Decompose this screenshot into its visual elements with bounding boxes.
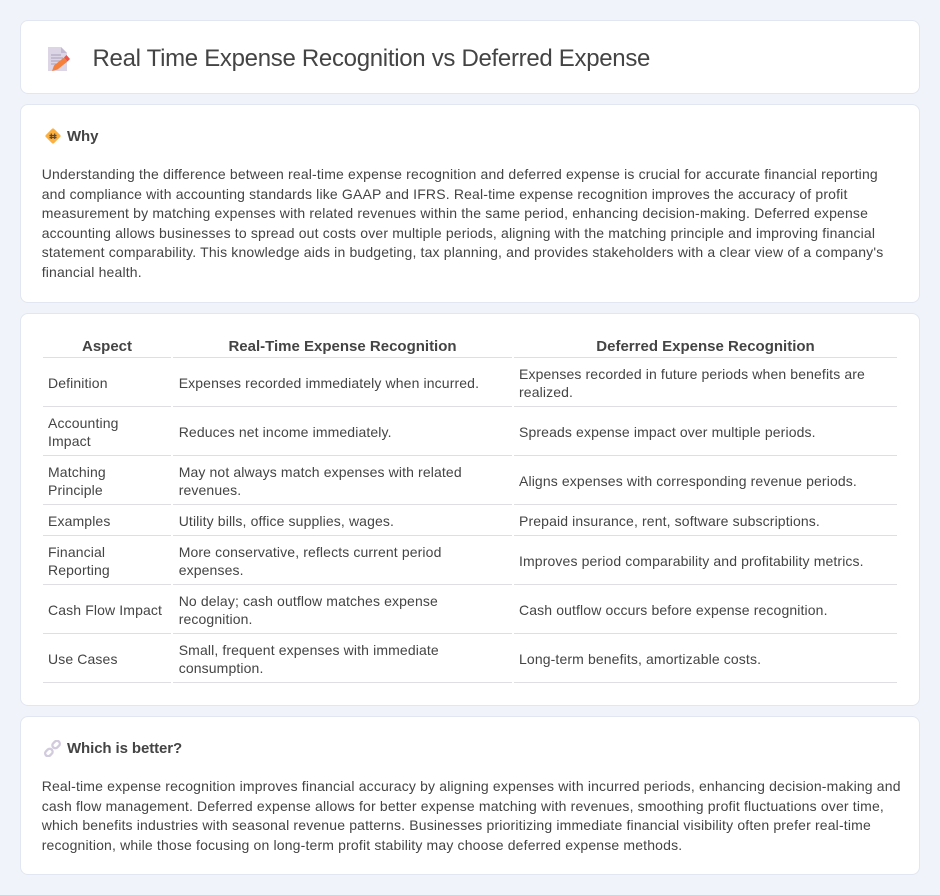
row: examples: Utility bills, office supplies, wages. [179,513,394,529]
table header row: Deferred Expense Recognition [596,338,815,355]
row: matching principle: Principle [48,482,103,498]
panel: why [20,104,920,303]
panel: header [20,20,920,94]
row: accounting impact: Reduces net income immediately. [179,424,392,440]
text block: why: financial health. [42,264,142,280]
row: cash flow impact [48,593,828,627]
text block: why: Understanding the difference between real-time expense recognition and deferred expense is crucial for accurate financial reporting [42,166,878,182]
table header row: Real-Time Expense Recognition [228,338,457,355]
row: matching principle: May not always match expenses with related [179,464,462,480]
text block: why [42,166,883,280]
row: financial reporting: More conservative, reflects current period [179,544,442,560]
row: matching principle: Aligns expenses with corresponding revenue periods. [519,473,857,489]
row: examples: Examples [48,513,110,529]
text block: why: measurement by matching expenses with related revenues within the same period, enhancing decision-making. Deferred expense [42,205,868,221]
row: definition [48,366,865,400]
row: cash flow impact: Cash Flow Impact [48,602,162,618]
row: matching principle: revenues. [179,482,241,498]
table header row [82,338,815,355]
heading: why: Why [67,128,98,145]
row: financial reporting: Improves period comparability and profitability metrics. [519,553,864,569]
row: definition: Definition [48,375,108,391]
text block: why: accounting allows businesses to spread out costs over multiple periods, aligning with the matching principle and improving financial [42,225,875,241]
row: accounting impact [48,415,816,449]
row: financial reporting: expenses. [179,562,244,578]
row: accounting impact: Impact [48,433,91,449]
row: matching principle [48,464,857,498]
row: cash flow impact: Cash outflow occurs before expense recognition. [519,602,828,618]
text block: which is better: which benefits industries with seasonal revenue patterns. Businesses prioritizing immediate financial visibility often prefer real-time [42,817,871,833]
row: accounting impact: Spreads expense impact over multiple periods. [519,424,816,440]
row: cash flow impact: recognition. [179,611,253,627]
panel: which is better [20,716,920,875]
title: Real Time Expense Recognition vs Deferred Expense [92,45,650,72]
row: use cases: Small, frequent expenses with immediate [179,642,439,658]
text block: why: statement comparability. This knowledge aids in budgeting, tax planning, and provides stakeholders with a clear view of a company's [42,244,883,260]
text block: which is better [42,778,901,853]
row: definition: Expenses recorded in future periods when benefits are [519,366,865,382]
row: definition: Expenses recorded immediately when incurred. [179,375,479,391]
text block: why: and compliance with accounting standards like GAAP and IFRS. Real-time expense recognition improves the accuracy of profit [42,186,848,202]
row: examples [48,513,820,529]
row: examples: Prepaid insurance, rent, software subscriptions. [519,513,820,529]
text block: which is better: recognition, while those focusing on long-term profit stability may choose deferred expense methods. [42,837,682,853]
icon: diamond sign [45,128,61,144]
heading: which is better: Which is better? [67,740,182,757]
row: use cases [48,642,761,676]
row: matching principle: Matching [48,464,106,480]
row: accounting impact: Accounting [48,415,119,431]
text block: which is better: cash flow management. Deferred expense allows for better expense matching with revenues, smoothing profit fluctuations over time, [42,798,884,814]
row: cash flow impact: No delay; cash outflow matches expense [179,593,438,609]
table header row: Aspect [82,338,132,355]
panel: comparison table [20,313,920,706]
row: use cases: consumption. [179,660,263,676]
row: financial reporting [48,544,864,578]
row: use cases: Long-term benefits, amortizable costs. [519,651,761,667]
row: financial reporting: Financial [48,544,105,560]
icon: chain link [44,740,61,757]
row: financial reporting: Reporting [48,562,110,578]
row: use cases: Use Cases [48,651,118,667]
icon: document with pencil [48,47,70,71]
text block: which is better: Real-time expense recognition improves financial accuracy by aligning expenses with incurred periods, enhancing decision-making and [42,778,901,794]
row: definition: realized. [519,384,573,400]
